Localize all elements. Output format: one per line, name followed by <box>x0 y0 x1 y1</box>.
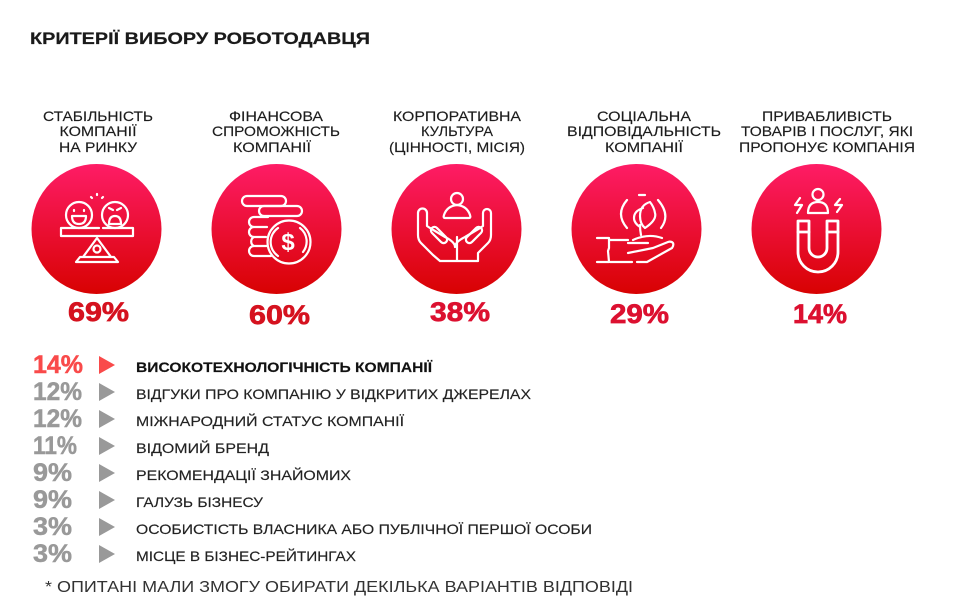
label: culture: (ЦІННОСТІ, МІСІЯ) <box>389 139 525 155</box>
label: finance: СПРОМОЖНІСТЬ <box>212 123 340 139</box>
label: culture: КУЛЬТУРА <box>421 123 494 139</box>
circle: finance <box>212 164 342 294</box>
title: КРИТЕРІЇ ВИБОРУ РОБОТОДАВЦЯ <box>30 29 370 48</box>
label: responsibility: СОЦІАЛЬНА <box>597 108 692 124</box>
row: known brand: 11% <box>33 432 77 460</box>
row: recommendations <box>33 459 352 487</box>
row: reviews: 12% <box>33 378 82 406</box>
label: stability: СТАБІЛЬНІСТЬ <box>43 108 153 124</box>
label: stability: КОМПАНІЇ <box>60 123 137 139</box>
label: responsibility: КОМПАНІЇ <box>605 139 683 155</box>
panel: criterion stability <box>32 108 162 327</box>
row: international status <box>33 405 404 433</box>
label: stability: НА РИНКУ <box>59 139 137 155</box>
icon: coins <box>242 196 310 264</box>
circle: responsibility <box>572 164 702 294</box>
row: reviews: ВІДГУКИ ПРО КОМПАНІЮ У ВІДКРИТИХ ДЖЕРЕЛАХ <box>136 386 532 402</box>
value: 14%: 14% <box>793 299 847 329</box>
value: 38%: 38% <box>430 297 490 327</box>
row: industry <box>33 486 263 514</box>
row: high tech: ВИСОКОТЕХНОЛОГІЧНІСТЬ КОМПАНІЇ <box>136 359 433 375</box>
row: owner personality: ОСОБИСТІСТЬ ВЛАСНИКА АБО ПУБЛІЧНОЇ ПЕРШОЇ ОСОБИ <box>136 521 592 537</box>
icon: dollar sign: $ <box>281 229 295 256</box>
list: other criteria <box>33 351 592 568</box>
panel: criterion responsibility <box>567 108 721 329</box>
panel: criterion attractiveness <box>739 108 915 329</box>
label: attractiveness: ПРОПОНУЄ КОМПАНІЯ <box>739 139 915 155</box>
panel: criterion finance <box>212 108 342 330</box>
row: known brand <box>33 432 270 460</box>
circle: culture <box>392 164 522 294</box>
row: high tech: 14% <box>33 351 83 379</box>
panel: criterion culture <box>389 108 525 327</box>
row: recommendations: 9% <box>33 459 72 487</box>
row: reviews <box>33 378 532 406</box>
row: industry: ГАЛУЗЬ БІЗНЕСУ <box>136 494 263 510</box>
label: attractiveness: ПРИВАБЛИВІСТЬ <box>762 108 892 124</box>
footnote: * ОПИТАНІ МАЛИ ЗМОГУ ОБИРАТИ ДЕКІЛЬКА ВАРІАНТІВ ВІДПОВІДІ <box>45 579 633 596</box>
row: business ratings <box>33 540 357 568</box>
value: 60%: 60% <box>249 300 310 330</box>
row: business ratings: 3% <box>33 540 72 568</box>
label: culture: КОРПОРАТИВНА <box>393 108 522 124</box>
row: industry: 9% <box>33 486 72 514</box>
value: 29%: 29% <box>610 299 669 329</box>
icon: magnet attracting person <box>795 189 842 272</box>
row: high tech <box>33 351 433 379</box>
icon: hand with plant <box>597 195 673 262</box>
label: finance: КОМПАНІЇ <box>233 139 311 155</box>
label: responsibility: ВІДПОВІДАЛЬНІСТЬ <box>567 123 721 139</box>
label: attractiveness: ТОВАРІВ І ПОСЛУГ, ЯКІ <box>741 123 913 139</box>
circle: stability <box>32 164 162 294</box>
row: known brand: ВІДОМИЙ БРЕНД <box>136 439 270 456</box>
row: international status: 12% <box>33 405 82 433</box>
row: business ratings: МІСЦЕ В БІЗНЕС-РЕЙТИНГАХ <box>136 547 357 564</box>
row: owner personality: 3% <box>33 513 72 541</box>
row: recommendations: РЕКОМЕНДАЦІЇ ЗНАЙОМИХ <box>136 466 352 483</box>
icon: balance scale with faces <box>61 194 133 262</box>
value: 69%: 69% <box>68 297 129 327</box>
label: finance: ФІНАНСОВА <box>229 108 324 124</box>
circle: attractiveness <box>752 164 882 294</box>
row: owner personality <box>33 513 592 541</box>
icon: hands holding person <box>418 193 491 261</box>
row: international status: МІЖНАРОДНИЙ СТАТУС КОМПАНІЇ <box>136 412 404 429</box>
